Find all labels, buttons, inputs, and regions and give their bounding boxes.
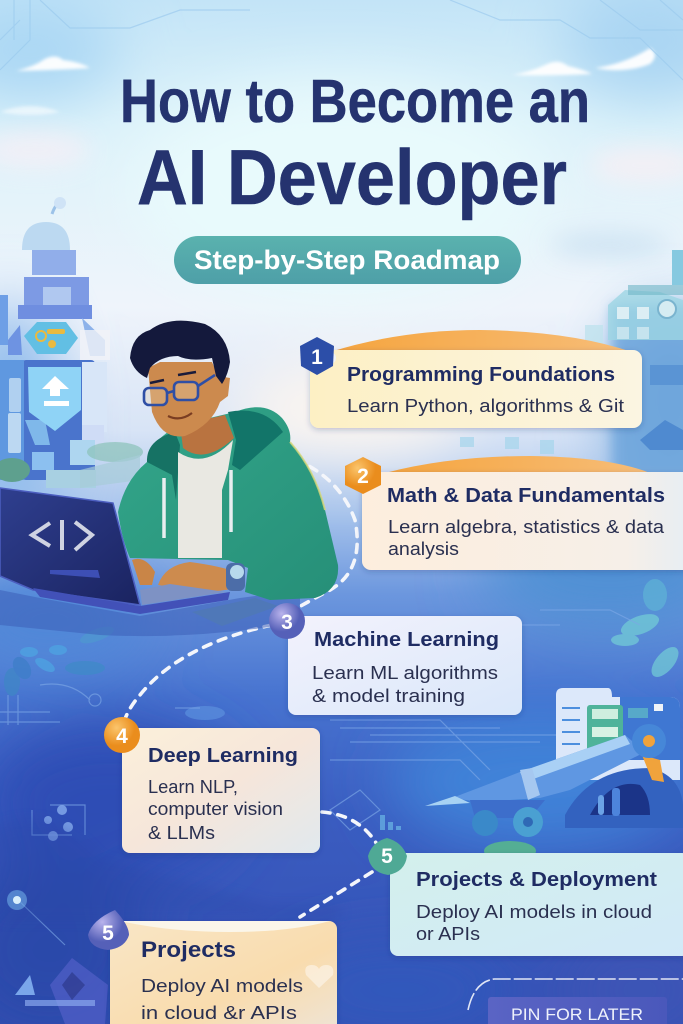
subtitle pill: Step-by-Step Roadmap [194, 245, 500, 275]
pin for later button [468, 979, 683, 1024]
step 1 badge [300, 337, 336, 375]
step 1 card: Learn Python, algorithms & Git [347, 396, 624, 416]
hand right [158, 562, 240, 592]
step 2 badge [345, 457, 381, 494]
character: developer with laptop [118, 321, 338, 600]
step 1 badge: 1 [311, 346, 323, 369]
step 5 badge: 5 [102, 922, 114, 945]
icon: faint heart [305, 965, 333, 988]
step 1 card [300, 330, 642, 428]
step 4 badge [104, 717, 140, 753]
eyebrows [150, 372, 196, 383]
illustration: robot tower left [0, 197, 143, 488]
step 3 card: & model training [312, 686, 465, 706]
city silhouette right [460, 250, 683, 480]
step 4 card: Deep Learning [148, 745, 298, 767]
title [120, 67, 590, 221]
glasses [144, 375, 215, 405]
illustration: robotic arm with dashboard panel [425, 688, 683, 861]
dashed roadmap path [122, 450, 378, 917]
step 2 badge: 2 [357, 465, 369, 488]
hair [130, 321, 230, 384]
step 4 card: computer vision [148, 799, 283, 819]
step 5 badge [368, 838, 407, 875]
step 2 card [345, 456, 683, 570]
step 3 card: Machine Learning [314, 629, 499, 651]
step 3 card [269, 603, 522, 715]
step 5 badge: 5 [381, 845, 393, 868]
face [148, 362, 230, 436]
step 5 card: projects and deployment [368, 838, 683, 956]
step 4 card: & LLMs [148, 823, 215, 843]
scene: circuit and leaf decoration lower area [0, 579, 683, 1024]
step 2 card: Math & Data Fundamentals [387, 485, 665, 507]
step 4 badge: 4 [116, 725, 128, 748]
smile [168, 413, 192, 418]
laptop [0, 488, 230, 614]
step 5 card: projects: in cloud &r APIs [141, 1003, 297, 1023]
title: How to Become an [120, 67, 590, 135]
step 2 card: analysis [388, 539, 459, 559]
step 3 badge: 3 [281, 611, 293, 634]
hoodie body [118, 407, 338, 600]
step 5 card: projects and deployment: or APIs [416, 924, 480, 944]
step 5 card: projects [88, 910, 337, 1024]
step 4 card [104, 717, 320, 853]
white t-shirt [178, 440, 233, 558]
icon: speech hexagon on robot [24, 322, 78, 354]
desk surface and notebook [0, 590, 300, 636]
step 4 card: Learn NLP, [148, 777, 238, 797]
wrist watch [226, 563, 245, 591]
step 5 card: projects and deployment: Projects & Deployment [416, 869, 657, 891]
step 5 card: projects and deployment: Deploy AI models in cloud [416, 902, 652, 922]
yellow rim light [290, 442, 325, 510]
white clouds [0, 48, 655, 115]
step 2 card: Learn algebra, statistics & data [388, 517, 665, 537]
hood inner right [228, 411, 283, 470]
icon: upload shield [28, 367, 81, 431]
neck [180, 415, 234, 455]
step 5 badge [88, 910, 129, 950]
circuit lines top corners [0, 0, 683, 80]
hood inner shade [147, 432, 180, 500]
step 3 card: Learn ML algorithms [312, 663, 498, 683]
hand left [132, 559, 155, 585]
pin for later button: PIN FOR LATER [511, 1005, 643, 1024]
title: AI Developer [137, 133, 567, 221]
step 3 badge [269, 603, 305, 639]
subtitle pill [174, 236, 521, 284]
step 5 card: projects: Deploy AI models [141, 976, 303, 996]
step 5 card: projects: Projects [141, 937, 236, 962]
step 1 card: Programming Foundations [347, 364, 615, 386]
code symbol on screen [32, 520, 92, 550]
hoodie strings [164, 470, 231, 538]
